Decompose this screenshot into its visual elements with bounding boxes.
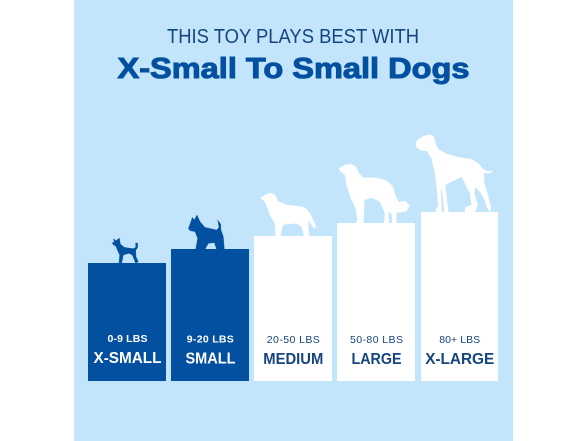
bar: x-large: [421, 212, 498, 381]
column: large: [337, 164, 415, 381]
column: small: [171, 215, 249, 381]
label: 20-50 lbs: 20-50 LBS: [267, 334, 320, 346]
bar: x-small: [88, 263, 166, 381]
column: medium: [254, 193, 332, 381]
icon: x-large dog silhouette: [416, 135, 493, 212]
label: 80+ lbs: 80+ LBS: [439, 334, 480, 346]
icon: large dog silhouette: [339, 164, 410, 224]
column: x-small: [88, 238, 166, 381]
bar: medium: [254, 236, 332, 381]
label: small: SMALL: [186, 350, 236, 368]
icon: medium dog silhouette: [261, 193, 316, 236]
label: x-large: X-LARGE: [425, 351, 494, 368]
label: 0-9 lbs: 0-9 LBS: [108, 333, 148, 345]
column: x-large: [416, 135, 498, 381]
background panel: [74, 0, 513, 441]
title: intro line: THIS TOY PLAYS BEST WITH: [167, 26, 419, 48]
label: x-small: X-SMALL: [94, 350, 162, 367]
icon: chihuahua silhouette: [112, 238, 138, 263]
label: 50-80 lbs: 50-80 LBS: [350, 334, 403, 346]
label: large: LARGE: [352, 351, 402, 368]
bar: small: [171, 249, 249, 381]
label: 9-20 lbs: 9-20 LBS: [187, 334, 234, 346]
icon: scottie silhouette: [188, 215, 224, 249]
label: medium: MEDIUM: [263, 351, 323, 368]
title: headline: X-Small To Small Dogs: [118, 53, 470, 85]
bar: large: [337, 223, 415, 381]
